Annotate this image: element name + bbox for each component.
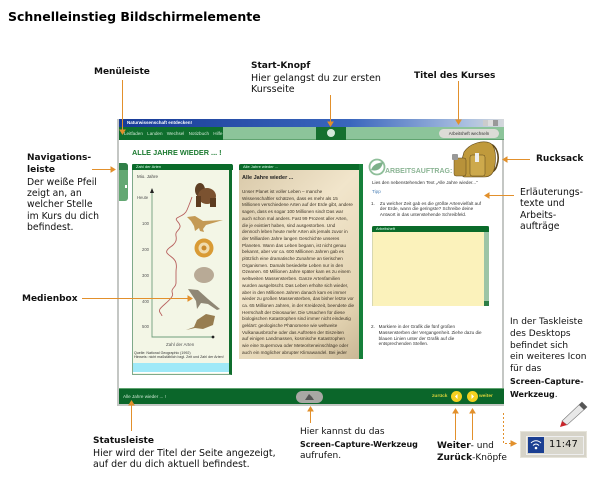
- text box body: Organismen. Damals besiedelte Leben nur in den: [242, 263, 343, 268]
- text box header: Alle Jahre wieder ...: [243, 164, 278, 169]
- media box header: Zahl der Arten: [136, 164, 161, 169]
- icon: gorilla: [195, 183, 216, 207]
- label: Navigationsleiste: [27, 153, 99, 233]
- chart: Hinweis: nicht maßstäblich bzgl. Zeit und Zahl der Arten!: [134, 355, 224, 359]
- start button: [316, 127, 346, 140]
- chart: 400: [142, 299, 150, 304]
- label: Erläuterungstexte: texte und: [520, 198, 565, 209]
- label: Weiter und Zurück: Zurück-Knöpfe: [437, 452, 507, 462]
- clock time: 11:47: [549, 439, 578, 450]
- panel: text box: [239, 164, 363, 359]
- next label: weiter: [479, 394, 493, 399]
- course button: Arbeitsheft wechseln: [449, 131, 489, 136]
- label: Taskleiste: Screen-Capture-: [510, 377, 584, 386]
- label: Navigationsleiste: welcher Stelle: [27, 199, 93, 210]
- chart: Mio. Jahre: [137, 174, 159, 179]
- icon: task logo: [368, 158, 386, 176]
- menu band: [119, 127, 504, 140]
- text box header: [239, 164, 363, 170]
- label: Start-Knopf: [251, 61, 381, 95]
- chart: [134, 174, 224, 359]
- panel: media box: [132, 164, 232, 375]
- label: Statusleiste: [93, 436, 276, 470]
- text box body: [242, 189, 354, 355]
- menu bar: Leitfaden Landen Wechsel Notizbuch Hilfe: [124, 131, 222, 136]
- label: Start-Knopf: Start-Knopf: [251, 61, 310, 71]
- task heading: ARBEITSAUFTRAG:: [385, 168, 452, 175]
- label: Screen-Capture: [300, 427, 418, 461]
- label: Erläuterungstexte: [520, 187, 583, 232]
- text box body: dennoch leben heute mehr Arten als jemals zuvor in: [242, 229, 348, 234]
- text box body: sagen, dass es sogar 100 Millionen sind! Das war: [242, 209, 343, 214]
- text box body: weltweiten Massensterben. Ganze Artenfamilien: [242, 276, 340, 281]
- text box body: Wissenschaftler schätzen, dass es mehr als 15: [242, 196, 338, 201]
- notebook corner: [484, 301, 489, 306]
- label: Erläuterungstexte: Erläuterungs-: [520, 187, 583, 198]
- label: Screen-Capture: aufrufen.: [300, 451, 341, 461]
- task 2 text: Massensterben der Vergangenheit. Ziehe dazu die: [379, 330, 482, 335]
- label: Taskleiste: ein weiteres Icon: [510, 352, 586, 362]
- task 2 text: [371, 324, 482, 346]
- chart: 300: [142, 273, 150, 278]
- text box body: Ozeanen. 60 Millionen Jahre später kam es zu einem: [242, 269, 351, 274]
- title: Schnelleinstieg Bildschirmelemente: [8, 9, 261, 24]
- screen capture button: [296, 391, 323, 403]
- label: Rucksack: Rucksack: [536, 154, 583, 164]
- text box body: bekannt, aber vor ca. 600 Millionen Jahren gab es: [242, 249, 344, 254]
- label: Navigationsleiste: im Kurs du dich: [27, 211, 99, 222]
- label: Navigationsleiste: Navigations-: [27, 153, 91, 163]
- icon: shell fossil: [194, 267, 214, 283]
- course button: [439, 129, 499, 138]
- label: Taskleiste: [510, 317, 586, 400]
- label: Menüleiste: Menüleiste: [94, 67, 150, 77]
- icon: ammonite: [194, 238, 214, 258]
- text box body: auf einigen Landmassen, kosmische Katastrophen: [242, 336, 345, 341]
- task 1 text: Antwort in das untenstehende Schreibfeld.: [380, 212, 466, 217]
- label: Erläuterungstexte: Arbeits-: [520, 210, 556, 221]
- label: Screen-Capture: Hier kannst du das: [300, 427, 385, 437]
- label: Navigationsleiste: befindest.: [27, 222, 73, 233]
- text box body: wurden ausgelöscht. Das Leben erholte sich wieder,: [242, 283, 348, 288]
- label: Taskleiste: des Desktops: [510, 329, 571, 339]
- label: Screen-Capture: Screen-Capture-Werkzeug: [300, 440, 418, 448]
- icon: trilobite: [186, 314, 215, 330]
- text box body: biologischen Katastrophen sind immer nicht eindeutig: [242, 316, 351, 321]
- label: Weiter und Zurück: [437, 441, 507, 462]
- tab top marker: [119, 163, 128, 170]
- icon: pen: [560, 402, 588, 427]
- icon: fish fossil: [188, 289, 220, 310]
- text box body: Vulkanausbrüche oder das Auftreten der Eiszeiten: [242, 330, 344, 335]
- status title: Alle Jahre wieder ... !: [123, 394, 166, 399]
- text box body: auch schon mal anders. Fast 99 Prozent aller Arten,: [242, 216, 348, 221]
- label: Titel des Kurses: Titel des Kurses: [414, 71, 495, 81]
- label: Statusleiste: auf der du dich aktuell befindest.: [93, 459, 250, 470]
- label: Navigationsleiste: leiste: [27, 165, 55, 175]
- label: Taskleiste: Werkzeug.: [510, 390, 558, 400]
- text box body: der Milliarden Jahre langen Geschichte unseres: [242, 236, 339, 241]
- label: Statusleiste: Statusleiste: [93, 436, 154, 446]
- window controls: [483, 120, 498, 126]
- text box body: ca. 65 Millionen Jahren, in der Kreidezeit, beendete die: [242, 303, 354, 308]
- label: Statusleiste: Hier wird der Titel der Seite angezeigt,: [93, 448, 276, 458]
- label: Erläuterungstexte: aufträge: [520, 221, 560, 232]
- text box body: Millionen verschiedene Arten auf der Erde gibt, andere: [242, 202, 353, 207]
- media box header: [132, 164, 233, 170]
- chart: 200: [142, 247, 150, 252]
- text box body: Planeten. Wann das Leben begann, ist nicht genau: [242, 243, 346, 248]
- window title bar: Naturwissenschaft entdecken!: [127, 120, 192, 125]
- notebook header: Arbeitsheft: [376, 226, 395, 231]
- task 1 text: 1. Zu welcher Zeit gab es die größte Artenvielfalt auf: [371, 201, 481, 206]
- timeline strip: [133, 363, 229, 373]
- chart: Zahl der Arten: [166, 342, 195, 347]
- backpack illustration: [452, 142, 499, 178]
- chart: 500: [142, 324, 150, 329]
- page heading: ALLE JAHRE WIEDER ... !: [132, 148, 222, 157]
- panel: application window: [117, 119, 504, 406]
- task 1 text: der Erde, wann die geringste? Schreibe deine: [380, 206, 473, 211]
- text box body: plötzlich eine dramatische Zunahme an tierischen: [242, 256, 343, 261]
- navigation tab: [119, 163, 128, 201]
- text box body: wieder zu großen Massensterben, das bisher letzte vor: [242, 296, 354, 301]
- menu bar: [119, 127, 223, 140]
- text box body: wie eine Supernova oder Meteoriteneinschläge oder: [242, 343, 348, 348]
- taskbar clock: [520, 431, 587, 458]
- chart: Heute: [137, 195, 149, 200]
- text box body: auch ein möglicher abrupter Klimawandel. Bei jeder: [242, 350, 347, 355]
- label: Taskleiste: befindet sich: [510, 341, 568, 351]
- label: Start-Knopf: Hier gelangst du zur ersten: [251, 72, 381, 84]
- next button: [467, 391, 478, 402]
- notebook header: [372, 226, 489, 232]
- label: Taskleiste: für das: [510, 364, 541, 374]
- clock inset: [526, 436, 584, 455]
- task 2 text: 2. Markiere in der Grafik die fünf großen: [371, 324, 455, 329]
- label: Navigationsleiste: zeigt an, an: [27, 188, 82, 199]
- text box body: geklärt: geologische Phänomene wie weltweite: [242, 323, 337, 328]
- label: Weiter und Zurück: Weiter- und: [437, 441, 494, 451]
- label: Start-Knopf: Kursseite: [251, 84, 295, 95]
- text box body: aber in den Millionen Jahren danach kam es immer: [242, 290, 346, 295]
- text box body: Herrschaft der Dinosaurier. Die Ursachen für diese: [242, 310, 345, 315]
- text box body: Unser Planet ist voller Leben – manche: [242, 189, 322, 194]
- text box heading: Alle Jahre wieder ...: [242, 175, 293, 181]
- text box body: die je existiert haben, sind ausgestorben. Und: [242, 223, 335, 228]
- chart: 100: [142, 221, 150, 226]
- icon: wireless: [528, 437, 544, 453]
- window title bar: [119, 119, 504, 127]
- label: Taskleiste: In der Taskleiste: [510, 317, 583, 327]
- task 2 text: entsprechenden Stellen.: [379, 341, 428, 346]
- label: Medienbox: Medienbox: [22, 294, 78, 304]
- back button: [451, 391, 462, 402]
- icon: dinosaur: [187, 216, 223, 232]
- task 1 text: [371, 201, 482, 217]
- status bar: [119, 388, 504, 404]
- notebook box: [372, 226, 489, 306]
- task intro: Lies den nebenstehenden Text „Alle Jahre wieder...": [372, 180, 478, 185]
- tab position arrow: [125, 185, 127, 188]
- task 2 text: blauen Linien unter der Grafik auf die: [379, 336, 454, 341]
- back label: zurück: [432, 394, 447, 399]
- label: Navigationsleiste: Der weiße Pfeil: [27, 177, 97, 188]
- chart: Quelle: National Geographic (1992): [134, 351, 191, 355]
- tip link: Tipp: [372, 189, 381, 194]
